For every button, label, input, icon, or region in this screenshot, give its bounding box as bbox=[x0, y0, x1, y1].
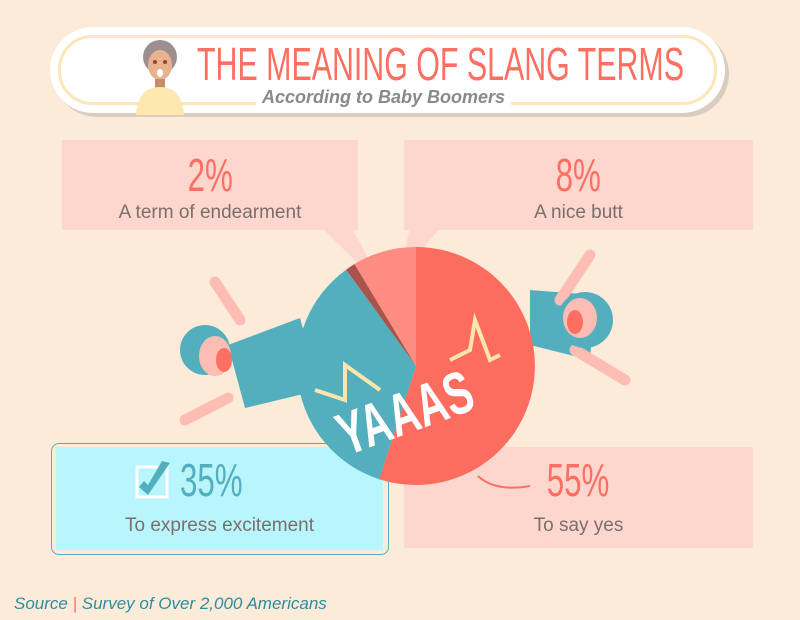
callout: 8%: 8% bbox=[556, 149, 601, 201]
girl character bbox=[530, 255, 625, 380]
arrow to 55% bbox=[478, 476, 530, 488]
callout: 35%: To express excitement bbox=[125, 515, 314, 536]
icon: grandmother bbox=[136, 40, 184, 115]
source: Source | Survey of Over 2,000 Americans bbox=[14, 594, 327, 613]
callout: 55%: 55% bbox=[547, 454, 610, 506]
pie slices bbox=[297, 247, 535, 485]
callout: 2%: A term of endearment bbox=[119, 202, 301, 223]
callout: 2% bbox=[62, 140, 358, 230]
icon: checkmark bbox=[136, 461, 170, 498]
callout: 55% bbox=[404, 447, 753, 548]
title banner bbox=[50, 27, 725, 113]
callout: 55%: To say yes bbox=[534, 515, 623, 536]
callout pointers bbox=[322, 228, 440, 290]
subtitle: According to Baby Boomers bbox=[262, 87, 505, 107]
callout: 35%: 35% bbox=[180, 454, 243, 506]
callout: 8%: A nice butt bbox=[534, 202, 623, 223]
YAAAS text: YAAAS bbox=[328, 357, 482, 468]
heading: THE MEANING OF SLANG TERMS bbox=[197, 38, 684, 90]
callout: 8% bbox=[404, 140, 753, 230]
callout: 35% bbox=[51, 443, 389, 555]
lightning bolts bbox=[315, 320, 500, 400]
callout: 2%: 2% bbox=[187, 149, 233, 201]
boy character bbox=[180, 282, 320, 420]
